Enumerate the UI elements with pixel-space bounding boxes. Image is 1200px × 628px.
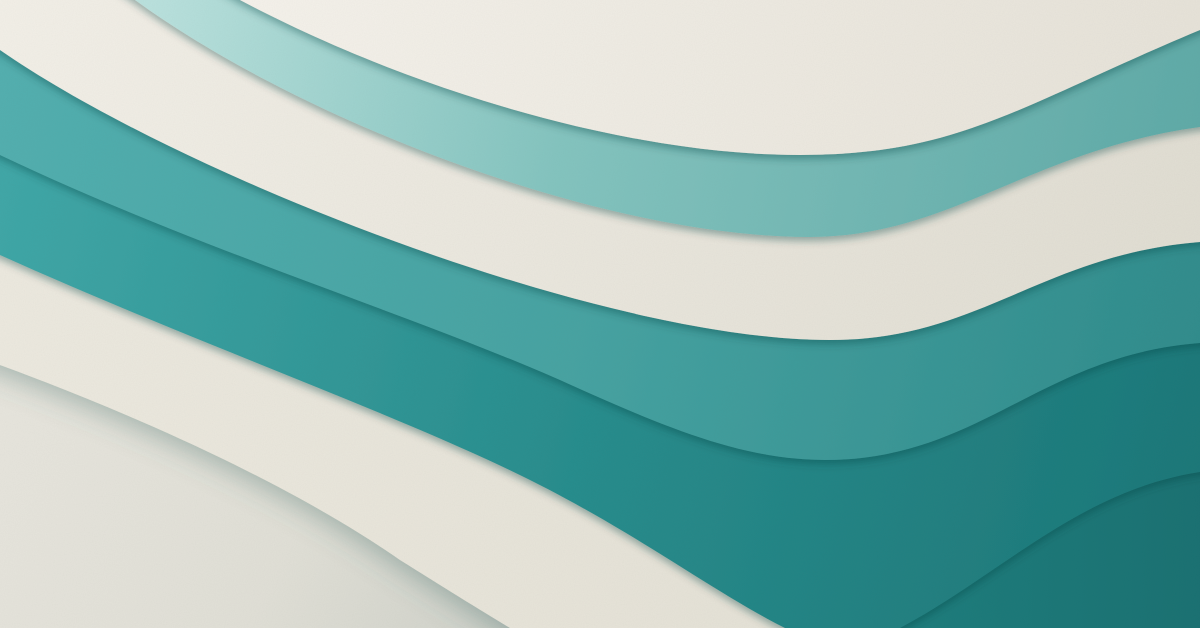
wave: mid teal layer	[0, 0, 1200, 460]
wave: light teal layer	[105, 0, 1200, 237]
wave: dark teal corner	[840, 440, 1200, 628]
wave: top cream layer	[205, 0, 1200, 155]
wave: wide cream layer	[0, 0, 1200, 340]
